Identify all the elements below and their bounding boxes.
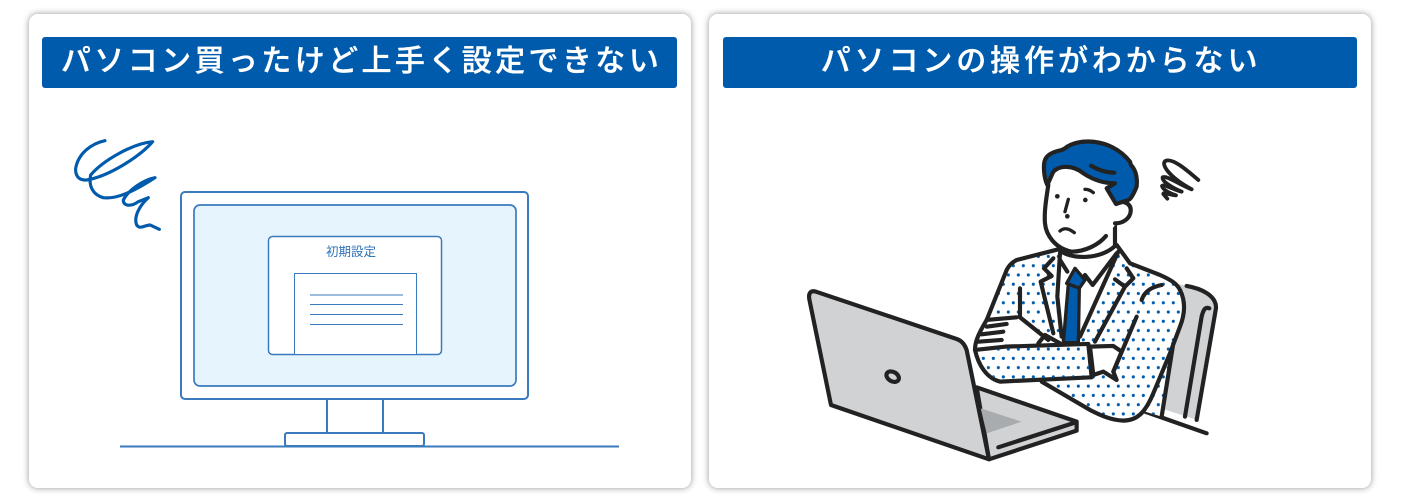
dialog title: 初期設定 xyxy=(326,245,376,259)
monitor frame xyxy=(181,192,528,399)
monitor base xyxy=(285,433,424,446)
collar curve and neck line xyxy=(1058,223,1115,257)
illustration: troubled businessman xyxy=(975,141,1216,433)
heading: operation trouble: パソコンの操作がわからない xyxy=(821,45,1261,78)
trackpad shadow xyxy=(981,408,1022,433)
jacket outline xyxy=(987,245,1184,421)
laptop lid xyxy=(809,291,989,459)
ear xyxy=(1115,202,1131,223)
forearm sleeve xyxy=(975,344,1092,382)
setup dialog xyxy=(268,236,442,354)
shirt xyxy=(1057,248,1117,337)
neck xyxy=(1046,220,1115,257)
illustration: laptop xyxy=(809,291,1077,459)
heading: operation trouble xyxy=(723,37,1357,88)
jacket polka dots xyxy=(977,245,1184,421)
dialog document xyxy=(294,274,416,354)
jacket xyxy=(977,245,1184,421)
icon: blue scribble xyxy=(76,141,159,229)
lapels and collar xyxy=(1041,252,1133,342)
monitor screen xyxy=(194,205,516,386)
laptop logo xyxy=(885,369,901,384)
base front edge xyxy=(998,423,1075,447)
sleeve folds xyxy=(1113,285,1162,372)
tie xyxy=(1063,268,1085,343)
hair strand xyxy=(1091,166,1114,173)
monitor stand xyxy=(327,399,383,433)
illustration: monitor with setup dialog xyxy=(120,192,619,446)
hair xyxy=(1044,141,1137,204)
panel: setup trouble xyxy=(29,14,691,488)
panel: operation trouble xyxy=(709,14,1371,488)
head xyxy=(1045,177,1117,251)
icon: dark scribble xyxy=(1162,160,1198,199)
heading: setup trouble: パソコン買ったけど上手く設定できない xyxy=(61,45,662,78)
tucked hand xyxy=(1090,346,1122,380)
face xyxy=(1055,189,1093,233)
hand and gripped arm xyxy=(975,288,1060,350)
document text lines xyxy=(310,295,403,324)
chair xyxy=(1145,283,1216,433)
desk line xyxy=(120,446,619,448)
laptop base xyxy=(977,387,1077,459)
heading: setup trouble xyxy=(42,37,677,88)
